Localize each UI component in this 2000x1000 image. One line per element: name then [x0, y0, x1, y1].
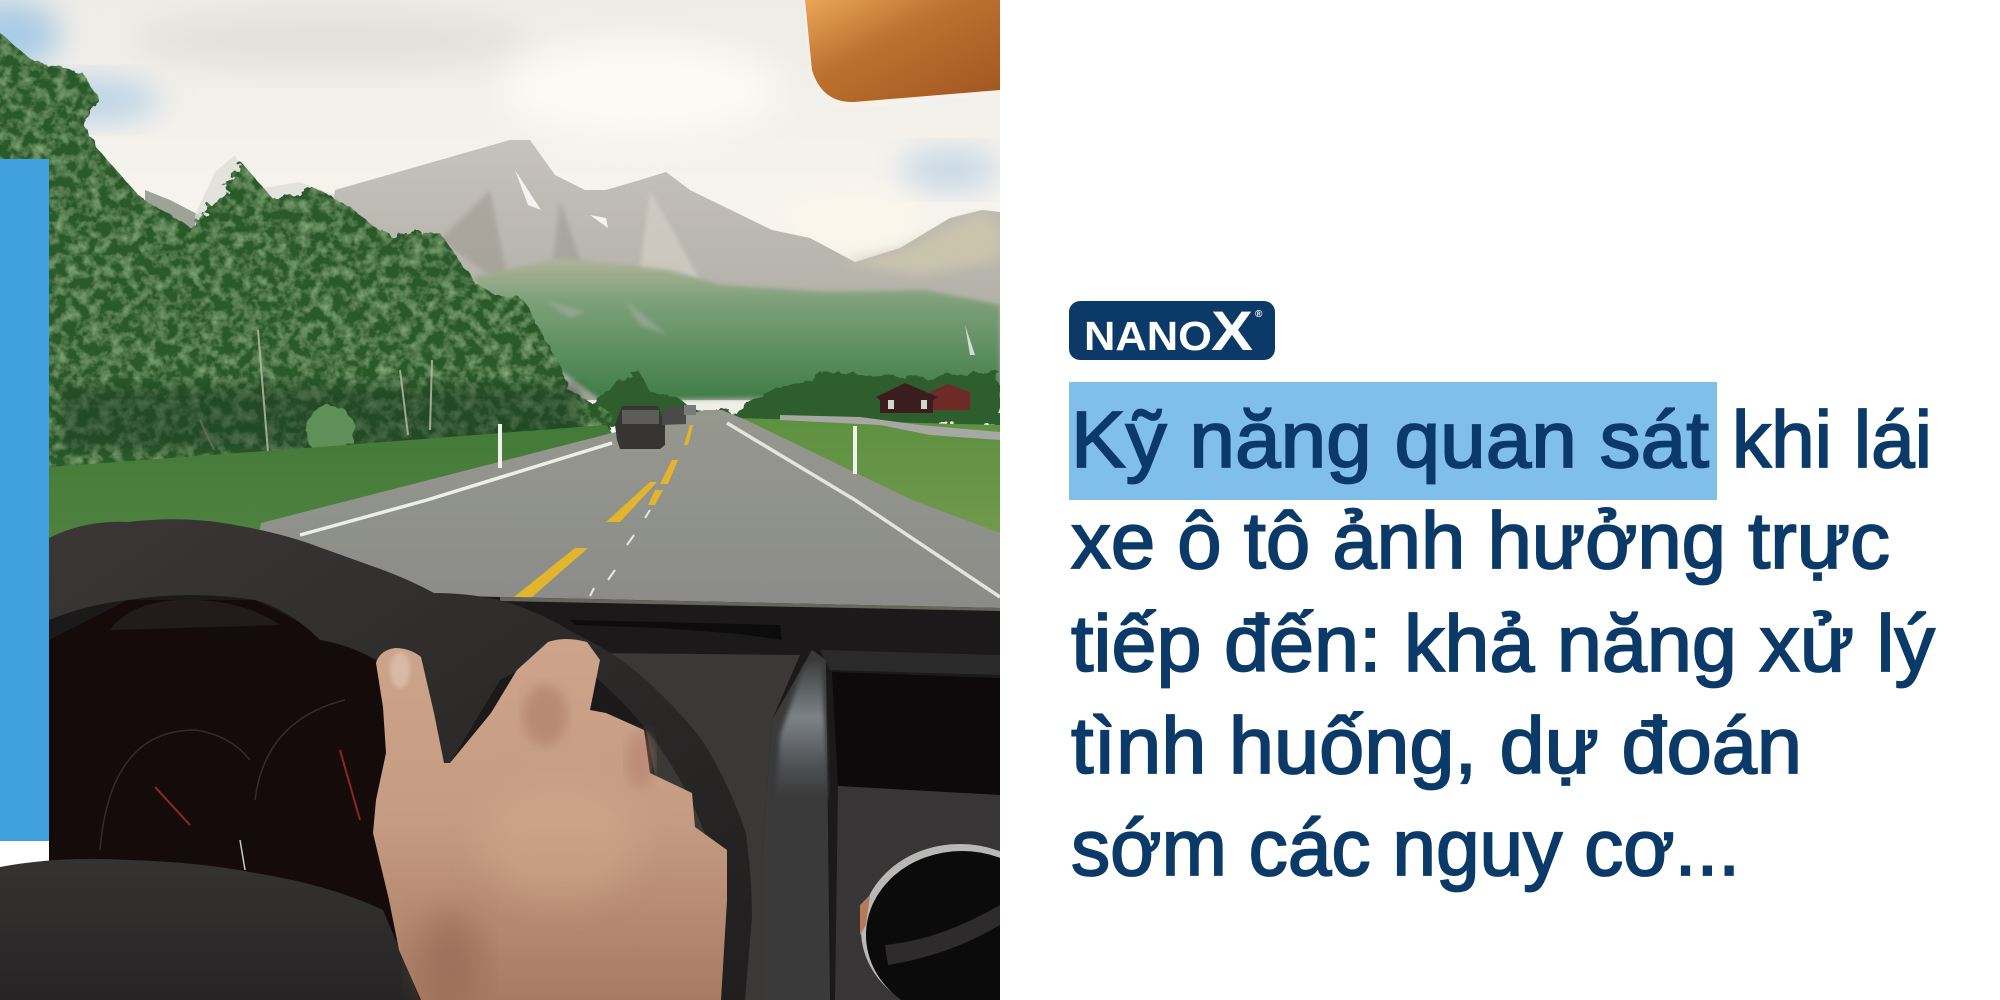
right-hand grass and side road — [735, 415, 1000, 540]
dark cabin — [876, 383, 938, 413]
headline text: khi lái — [1732, 395, 1932, 484]
birch trunks — [200, 330, 432, 452]
mountains — [145, 140, 1000, 400]
sky with clouds — [0, 0, 1000, 420]
headline text: tiếp đến: khả năng xử lý — [1071, 599, 1935, 688]
headline text — [1071, 395, 1935, 892]
headline text: Kỹ năng quan sát — [1071, 395, 1709, 484]
steering wheel hub — [0, 859, 420, 1000]
left-hand grass verge — [49, 425, 612, 545]
sun visor — [803, 0, 1000, 108]
dashboard and console — [49, 595, 1000, 1000]
glossy pillar — [762, 650, 830, 1000]
green lower slope — [472, 258, 1000, 400]
dark screen recess — [832, 672, 1000, 795]
NanoX logo: ® — [1255, 309, 1263, 320]
driver's hand on wheel — [373, 639, 727, 1000]
far tree line and houses — [570, 370, 1000, 425]
forest on the left — [0, 33, 612, 467]
NanoX logo: X — [1211, 299, 1253, 362]
cars on the road — [615, 405, 696, 449]
wiper — [570, 620, 782, 640]
instrument cluster interior — [49, 600, 420, 1000]
headline text: sớm các nguy cơ... — [1071, 803, 1740, 892]
road — [240, 410, 1000, 620]
air vent — [860, 844, 1000, 1000]
blue accent bar — [0, 159, 49, 841]
steering wheel rim — [49, 519, 752, 1000]
headline text: xe ô tô ảnh hưởng trực — [1071, 496, 1890, 585]
NanoX logo — [1069, 299, 1275, 362]
headline text: tình huống, dự đoán — [1071, 701, 1802, 790]
lower panel — [835, 786, 1000, 1000]
road marker posts — [498, 424, 857, 474]
NanoX logo: NANO — [1084, 313, 1212, 359]
gray dash surface — [590, 653, 800, 1000]
red house — [930, 384, 970, 410]
console top — [820, 650, 1000, 675]
highlight behind key phrase — [1069, 382, 1717, 500]
photo: view through windshield from driver seat — [0, 0, 1059, 1000]
